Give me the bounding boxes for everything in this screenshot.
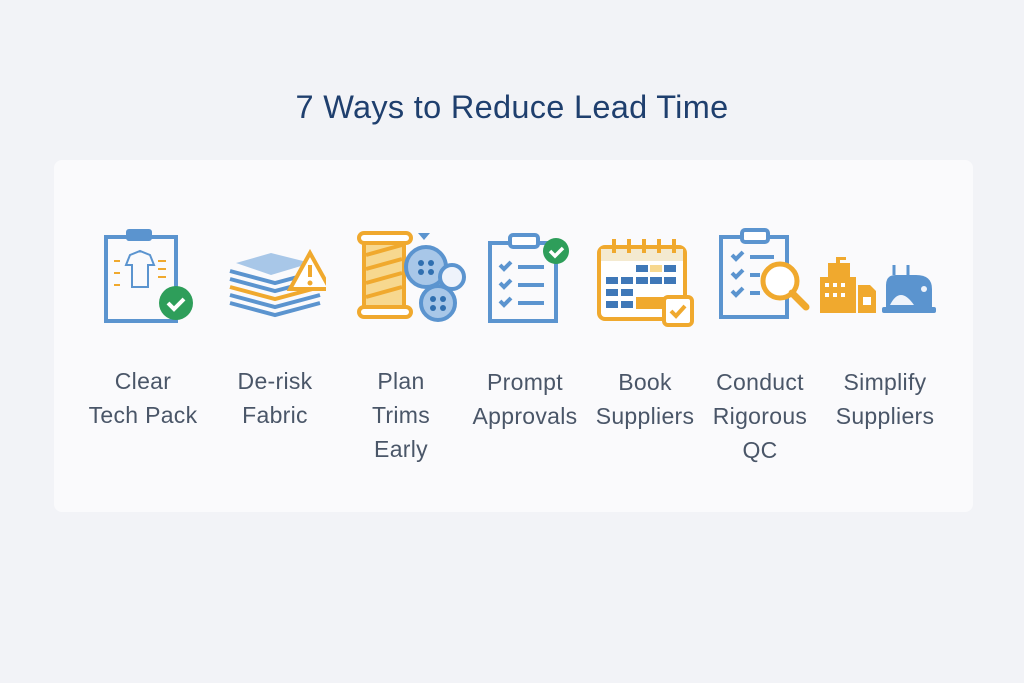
icon: prompt approvals (488, 233, 569, 323)
panel: ways (54, 160, 973, 512)
label: de-risk fabric (238, 368, 312, 428)
label: plan trims early: Early (374, 436, 428, 462)
title: 7 Ways to Reduce Lead Time (296, 89, 728, 125)
label: simplify suppliers: Suppliers (836, 403, 934, 429)
label: clear tech pack (89, 368, 198, 428)
label: plan trims early: Plan (377, 368, 425, 394)
icon: de-risk fabric (230, 249, 326, 318)
label: clear tech pack: Tech Pack (89, 402, 197, 428)
icon: plan trims early (357, 231, 466, 322)
label: book suppliers (596, 369, 694, 429)
label: prompt approvals: Approvals (472, 403, 577, 429)
label: book suppliers: Suppliers (596, 403, 694, 429)
label: conduct rigorous qc (713, 369, 807, 463)
label: conduct rigorous qc: Rigorous (713, 403, 807, 429)
icon: book suppliers (597, 239, 694, 327)
label: book suppliers: Book (618, 369, 672, 395)
label: de-risk fabric: De-risk (238, 368, 312, 394)
label: prompt approvals (472, 369, 577, 429)
label: prompt approvals: Prompt (487, 369, 563, 395)
label: plan trims early (372, 368, 430, 462)
icon: conduct rigorous qc (719, 228, 810, 319)
label: de-risk fabric: Fabric (242, 402, 308, 428)
label: plan trims early: Trims (372, 402, 430, 428)
label: conduct rigorous qc: QC (742, 437, 778, 463)
label: simplify suppliers: Simplify (844, 369, 926, 395)
label: clear tech pack: Clear (115, 368, 171, 394)
label: simplify suppliers (836, 369, 934, 429)
label: conduct rigorous qc: Conduct (716, 369, 804, 395)
icon: clear tech pack (104, 229, 193, 323)
icon: simplify suppliers (820, 257, 936, 313)
